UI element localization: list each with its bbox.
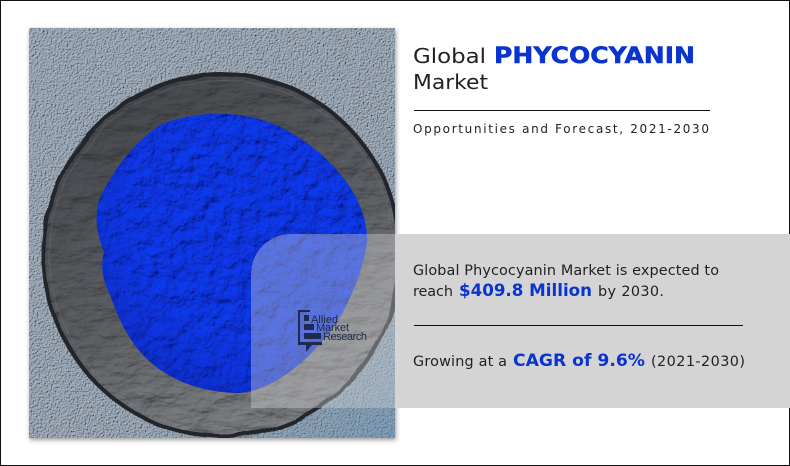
translucent panel over photo [251, 234, 395, 408]
title [413, 44, 695, 94]
market size statement: $409.8 Million [459, 281, 592, 300]
logo wordmark: Allied [311, 314, 338, 326]
market size statement [413, 263, 719, 300]
subtitle: Opportunities and Forecast, 2021-2030 [413, 122, 709, 136]
logo wordmark [311, 314, 367, 343]
logo: Allied Market Research [298, 310, 367, 352]
title: PHYCOCYANIN [494, 44, 695, 69]
CAGR statement: Growing at a [413, 354, 507, 370]
title divider [414, 110, 710, 111]
stat divider [414, 325, 743, 326]
logo wordmark: Market [316, 322, 349, 334]
market size statement: reach [413, 284, 453, 300]
market size statement: by 2030. [598, 284, 664, 300]
stat panel background [395, 234, 790, 408]
logo wordmark: Research [323, 331, 367, 343]
photo: plate [35, 65, 410, 445]
CAGR statement: (2021-2030) [651, 354, 745, 370]
photo: concrete surface [29, 28, 395, 438]
title: Market [413, 70, 488, 94]
market size statement: Global Phycocyanin Market is expected to [413, 263, 719, 279]
photo: powder mound [90, 105, 375, 400]
CAGR statement: CAGR of 9.6% [513, 351, 645, 370]
logo icon [298, 310, 322, 352]
CAGR statement [413, 351, 745, 370]
title: Global [413, 44, 486, 68]
photo: blue phycocyanin powder on a dark plate [29, 28, 410, 445]
